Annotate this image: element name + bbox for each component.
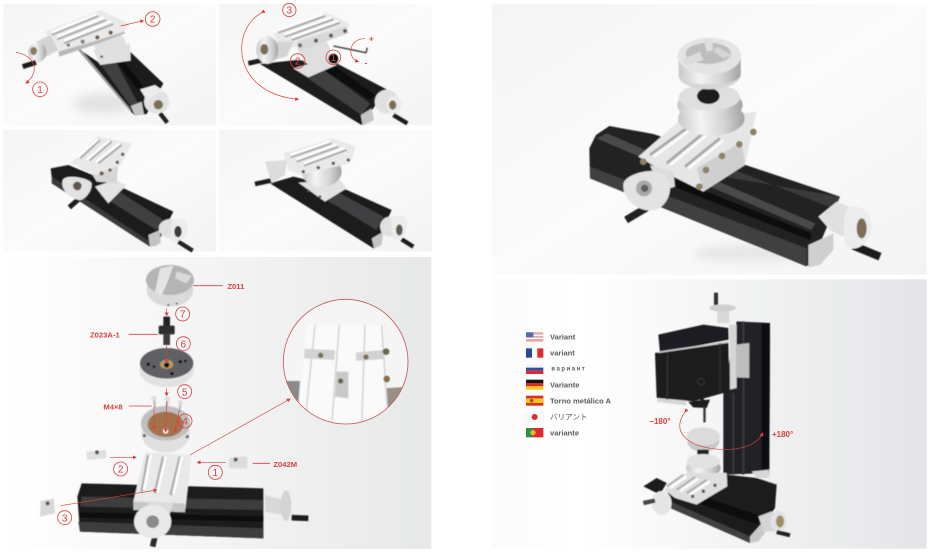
label: Z011: Z011 (227, 282, 245, 291)
hand wheel (714, 293, 718, 307)
far handwheel (758, 511, 785, 531)
near handwheel (643, 478, 667, 495)
label: Z023A-1 (90, 331, 157, 340)
flag: USA (526, 332, 543, 342)
legend text: Torno metálico A (550, 397, 612, 406)
near handwheel (626, 207, 648, 220)
markers 1 to 7: 5 (182, 387, 188, 398)
slide (664, 473, 727, 505)
legend text: variante (550, 429, 579, 438)
arrow: plus minus adjustment (351, 34, 374, 67)
panel background (219, 4, 432, 125)
flag legend (526, 332, 543, 437)
part: rotary base (141, 406, 190, 453)
rotary (686, 459, 721, 477)
panel: cross slide rotated on axis 1 and 2 (3, 4, 216, 125)
label: minus 180 degrees: −180° (649, 417, 671, 426)
label: Z042M (253, 460, 297, 469)
marker 1 (326, 50, 341, 65)
label: Z011 (193, 282, 245, 291)
assembly arrows (61, 308, 290, 506)
marker 3: 3 (287, 6, 293, 17)
magnifier detail circle (283, 299, 410, 425)
markers 1 to 7: 6 (181, 339, 187, 350)
panel background (492, 279, 927, 549)
legend text: variant (550, 349, 575, 358)
arrow: rotation range (680, 412, 763, 450)
panel background (492, 4, 927, 275)
photo: cross slide angled along the bed (23, 10, 169, 123)
flag: Germany (526, 380, 543, 390)
markers 1 to 7: 3 (62, 513, 68, 524)
arrow: slide out (121, 21, 143, 26)
legend text: Variant (550, 332, 576, 341)
panel: assembled cross slide with rotary table and chuck (492, 4, 927, 275)
flag: Spain (526, 396, 543, 406)
label: Z023A-1: Z023A-1 (90, 331, 121, 340)
marker 3 (283, 3, 296, 17)
chuck and key (698, 380, 703, 401)
flag: Portugal (526, 428, 543, 437)
marker 1 (33, 82, 47, 97)
part: round plate (139, 348, 194, 387)
markers 1 to 7: 4 (182, 417, 188, 428)
arrow: large swing (242, 13, 298, 99)
panel: slide in neutral position (219, 130, 432, 251)
head (658, 325, 729, 353)
markers 1 to 7: 2 (118, 465, 124, 476)
panel background (3, 4, 216, 125)
marker 2 (145, 12, 160, 26)
marker 2: 2 (295, 57, 301, 68)
part: three screws (151, 396, 183, 412)
markers 1 to 7: 7 (180, 310, 186, 321)
markers 1 to 7 (58, 307, 222, 525)
legend text: Variante (550, 380, 579, 389)
flag: Japan (526, 412, 543, 422)
far handwheel (853, 246, 880, 257)
chuck (679, 63, 740, 89)
column (723, 321, 770, 475)
photo: slide tilted left (51, 137, 193, 251)
marker 1: 1 (331, 53, 337, 64)
panel: tilted cross slide (3, 130, 216, 251)
photo: swivelled cross slide (248, 13, 407, 126)
slide plate (729, 325, 737, 390)
panel: milling machine configuration (492, 279, 927, 549)
label: M4x8: M4×8 (103, 402, 123, 411)
marker 1: 1 (37, 85, 43, 96)
part: chuck (146, 265, 194, 307)
arrow: rotation 1 (16, 52, 34, 83)
legend text (550, 332, 612, 438)
part: T-nut 2 (86, 450, 106, 460)
markers 1 to 7: 1 (213, 468, 219, 479)
panel background (3, 130, 216, 251)
label: Z042M: Z042M (273, 460, 297, 469)
panel: swivel adjustment with allen key (219, 3, 432, 126)
part: T-nut 1 (229, 457, 247, 468)
work chuck (687, 431, 719, 452)
slide table (638, 112, 757, 192)
panel background (3, 257, 431, 549)
label: M4x8 (103, 402, 152, 411)
photo: machine with chuck (589, 37, 880, 267)
photo: milling machine (643, 293, 790, 543)
part: T-nut 3 (40, 498, 55, 517)
flag: France (526, 348, 543, 358)
flag: Russia (526, 365, 543, 374)
arrow: plus minus adjustment: - (365, 58, 368, 67)
photo: slide neutral (255, 138, 413, 249)
base (657, 475, 777, 543)
marker 2: 2 (150, 15, 156, 26)
panel background (219, 130, 432, 251)
part: adapter spindle (159, 317, 175, 345)
panel: exploded assembly diagram (3, 257, 431, 549)
bed (589, 126, 840, 267)
legend text: バリアント (550, 413, 588, 422)
part: bed with slide (77, 452, 308, 547)
marker 2 (290, 54, 305, 68)
label: plus 180 degrees: +180° (772, 430, 793, 439)
rotary (678, 101, 745, 136)
arrow: plus minus adjustment: + (369, 34, 374, 43)
legend text: вариант (551, 366, 586, 372)
